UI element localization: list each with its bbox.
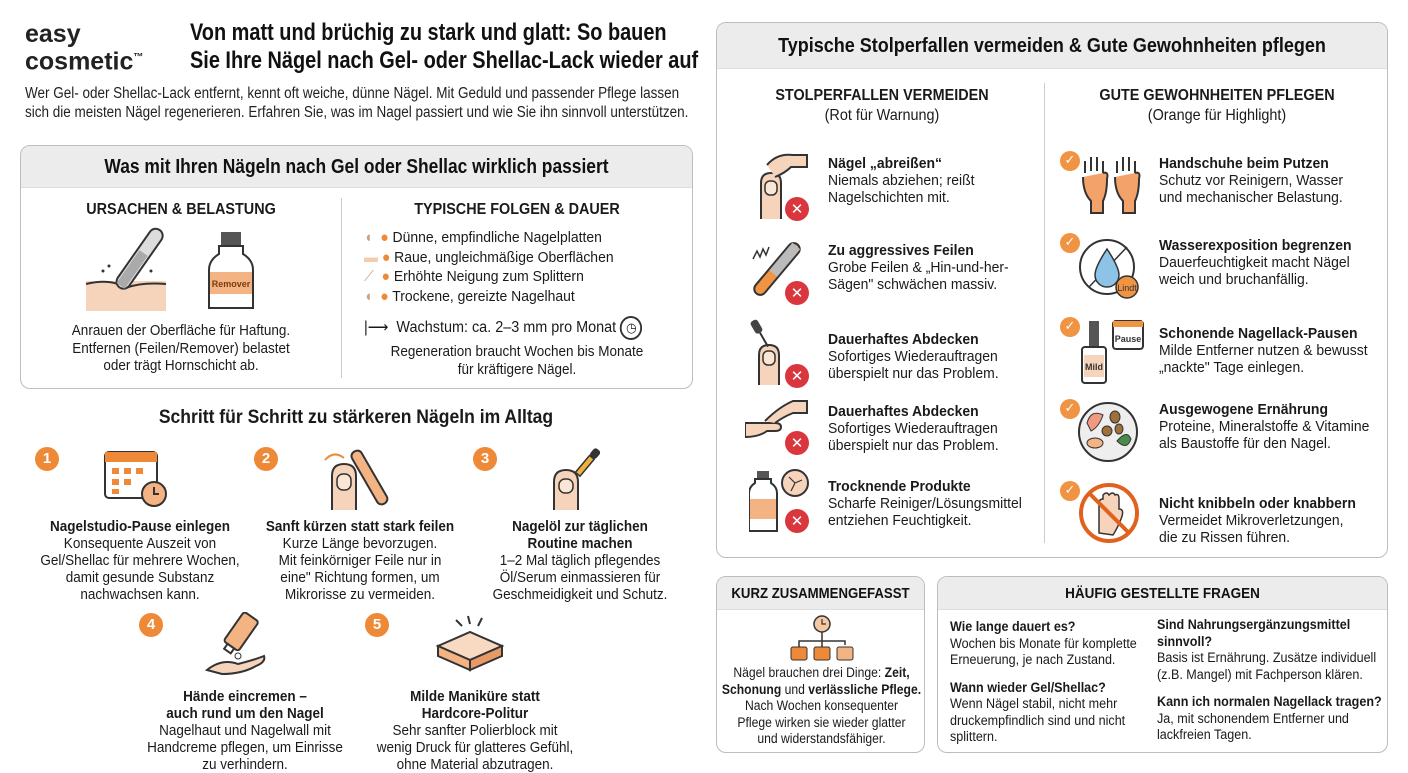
intro text: sich die meisten Nägel regenerieren. Erfahren Sie, was im Nagel passiert und wie Sie ihn sinnvoll unterstützen. (25, 104, 688, 121)
logo: cosmetic™ (25, 47, 143, 75)
step 1: Konsequente Auszeit von (64, 535, 216, 552)
pitfall 3: ✕ (791, 367, 803, 385)
step 3: 1–2 Mal täglich pflegendes (500, 552, 660, 569)
icon: food plate (1078, 402, 1138, 462)
pitfall 2: Sägen" schwächen massiv. (828, 276, 997, 293)
pitfall 4: Sofortiges Wiederauftragen (828, 420, 998, 437)
consequences list: ◖ ● Dünne, empfindliche Nagelplatten (364, 229, 602, 246)
icon: remover bottle (208, 232, 254, 309)
FAQ column right: sinnvoll? (1157, 634, 1212, 648)
habit 3 (1060, 317, 1368, 384)
panel heading: Was mit Ihren Nägeln nach Gel oder Shellac wirklich passiert (104, 156, 609, 178)
icon: hand flat (745, 400, 808, 438)
habit 5: ✓ (1065, 483, 1075, 498)
icon: remover bottle: Remover (212, 279, 251, 289)
FAQ column right: Ja, mit schonendem Entferner und (1157, 710, 1349, 726)
step 4: zu verhindern. (202, 756, 288, 773)
logo (25, 20, 143, 75)
habit 4: Proteine, Mineralstoffe & Vitamine (1159, 418, 1369, 435)
habit 3: „nackte" Tage einlegen. (1159, 359, 1304, 376)
habit 3: Schonende Nagellack-Pausen (1159, 325, 1357, 342)
step 2 (254, 447, 454, 603)
FAQ heading: HÄUFIG GESTELLTE FRAGEN (1065, 585, 1260, 602)
icon: polish and pause calendar (1081, 320, 1144, 384)
step 4: Hände eincremen – (183, 688, 307, 705)
left column heading: STOLPERFALLEN VERMEIDEN (775, 87, 989, 104)
right column heading (1099, 87, 1335, 124)
summary text: Nägel brauchen drei Dinge: Zeit, (733, 665, 910, 680)
pitfall 1 (760, 154, 975, 221)
step 5 (365, 613, 573, 773)
FAQ column left: Wie lange dauert es? (950, 619, 1075, 634)
pitfall 1: ✕ (791, 200, 803, 218)
summary heading (717, 577, 924, 610)
right column heading: GUTE GEWOHNHEITEN PFLEGEN (1099, 87, 1335, 104)
summary text: Nach Wochen konsequenter (745, 698, 898, 713)
habit 2: Dauerfeuchtigkeit macht Nägel (1159, 254, 1350, 271)
FAQ column right: (z.B. Mangel) mit Fachperson klären. Kann ich normalen Nagellack tragen? (1157, 666, 1382, 709)
step 1: damit gesunde Substanz (66, 569, 214, 586)
icon: hand cream (205, 612, 266, 675)
pitfall 2 (752, 242, 1009, 305)
logo: easy (25, 20, 81, 48)
left column heading: (Rot für Warnung) (825, 107, 939, 124)
FAQ column left (950, 619, 1137, 746)
habit 1: Schutz vor Reinigern, Wasser (1159, 172, 1343, 189)
title: Sie Ihre Nägel nach Gel- oder Shellac-Lack wieder auf (190, 47, 698, 74)
regeneration text: Regeneration braucht Wochen bis Monate (391, 343, 643, 360)
pitfall 3: Dauerhaftes Abdecken (828, 331, 979, 348)
step 1: Gel/Shellac für mehrere Wochen, (40, 552, 240, 569)
left column heading (775, 87, 989, 124)
step 1: 1 (43, 450, 51, 467)
habit 5: Vermeidet Mikroverletzungen, (1159, 512, 1344, 529)
icon: polish and pause calendar: Pause (1115, 334, 1141, 344)
panel heading: Typische Stolperfallen vermeiden & Gute Gewohnheiten pflegen (778, 35, 1326, 57)
habit 4: ✓ (1065, 401, 1075, 416)
step 5: Sehr sanfter Polierblock mit (392, 722, 558, 739)
habit 3: Milde Entferner nutzen & bewusst (1159, 342, 1368, 359)
icon: polishing block (436, 616, 504, 672)
consequences list (364, 229, 614, 304)
FAQ column right: lackfreien Tagen. (1157, 727, 1252, 742)
title: Von matt und brüchig zu stark und glatt: So bauen (190, 19, 667, 46)
pitfall 5 (749, 469, 1022, 533)
step 1 (35, 447, 240, 603)
step 5: 5 (373, 616, 381, 633)
icon: clock hierarchy (787, 615, 857, 663)
pitfall 3: überspielt nur das Problem. (828, 365, 999, 382)
summary text: Schonung und verlässliche Pflege. (722, 682, 921, 696)
FAQ column left: Wochen bis Monate für komplette (950, 636, 1137, 650)
FAQ column left: splittern. (950, 729, 997, 744)
consequences list: ◖ ● Trockene, gereizte Nagelhaut (364, 288, 575, 304)
icon: nail oil dropper (553, 448, 600, 510)
step 3: Öl/Serum einmassieren für (500, 569, 660, 586)
icon: water drop crossed (1079, 239, 1139, 299)
pitfall 5: ✕ (791, 512, 803, 530)
icon: calendar (104, 451, 167, 507)
step 2: eine" Richtung formen, um (280, 569, 440, 586)
left text: Anrauen der Oberfläche für Haftung. (72, 322, 290, 339)
step 4: auch rund um den Nagel (166, 705, 324, 722)
habit 4 (1060, 399, 1369, 462)
panel: what happens (20, 145, 693, 389)
growth line: |⟶ Wachstum: ca. 2–3 mm pro Monat (364, 319, 616, 336)
growth line (364, 316, 642, 340)
step 2: Mikrorisse zu vermeiden. (285, 586, 435, 603)
pitfall 3: Sofortiges Wiederauftragen (828, 348, 998, 365)
summary text: Pflege wirken sie wieder glatter (737, 714, 906, 730)
habit 3: ✓ (1065, 319, 1075, 334)
pitfall 5: Scharfe Reiniger/Lösungsmittel (828, 495, 1022, 512)
step 3: Routine machen (527, 535, 633, 552)
FAQ column right (1157, 617, 1382, 744)
habit 2: Wasserexposition begrenzen (1159, 237, 1352, 254)
left text: oder trägt Hornschicht ab. (103, 357, 259, 374)
pitfall 2: Zu aggressives Feilen (828, 242, 974, 259)
step 3: Nagelöl zur täglichen (512, 518, 648, 535)
left text (72, 322, 290, 374)
step 5: wenig Druck für glatteres Gefühl, (377, 739, 573, 756)
icon: water drop crossed: Lindt (1117, 283, 1137, 293)
step 1: nachwachsen kann. (80, 586, 200, 603)
FAQ column right: Sind Nahrungsergänzungsmittel (1157, 617, 1350, 632)
right heading: TYPISCHE FOLGEN & DAUER (414, 201, 620, 218)
step 5: ohne Material abzutragen. (397, 756, 553, 773)
panel: FAQ (937, 576, 1388, 753)
regeneration text: für kräftigere Nägel. (458, 361, 576, 378)
regeneration text (391, 343, 643, 378)
step 2: Sanft kürzen statt stark feilen (266, 518, 454, 535)
icon: nail file on skin (86, 228, 166, 311)
pitfall 5: Trocknende Produkte (828, 478, 971, 495)
habit 2: weich und bruchanfällig. (1159, 271, 1309, 288)
icon: finger and file (324, 450, 388, 510)
habit 2 (1060, 233, 1352, 299)
panel: summary (716, 576, 925, 753)
pitfall 3 (750, 320, 999, 388)
habit 4: Ausgewogene Ernährung (1159, 401, 1328, 418)
habit 2: ✓ (1065, 235, 1075, 250)
pitfall 1: Niemals abziehen; reißt (828, 172, 975, 189)
pitfall 1: Nagelschichten mit. (828, 189, 950, 206)
consequences list: ⟋ ● Erhöhte Neigung zum Splittern (364, 268, 584, 285)
intro text (25, 85, 688, 121)
growth line: ◷ (626, 320, 637, 335)
left text: Entfernen (Feilen/Remover) belastet (72, 340, 290, 356)
pitfall 1: Nägel „abreißen“ (828, 155, 942, 172)
FAQ column left: Erneuerung, je nach Zustand. Wann wieder Gel/Shellac? (950, 652, 1115, 694)
step 5: Milde Maniküre statt (410, 688, 540, 705)
step 4: 4 (147, 616, 155, 633)
FAQ column left: Wenn Nägel stabil, nicht mehr (950, 696, 1117, 711)
summary heading: KURZ ZUSAMMENGEFASST (731, 585, 910, 602)
habit 5: Nicht knibbeln oder knabbern (1159, 495, 1356, 512)
step 2: Mit feinkörniger Feile nur in (279, 552, 441, 569)
step 5: Hardcore-Politur (422, 705, 528, 722)
pitfall 2: ✕ (791, 284, 803, 302)
step 3 (473, 447, 667, 603)
pitfall 4: ✕ (791, 434, 803, 452)
habit 5 (1060, 481, 1356, 546)
steps heading: Schritt für Schritt zu stärkeren Nägeln im Alltag (159, 406, 553, 428)
step 2: Kurze Länge bevorzugen. (283, 535, 437, 552)
consequences list: ▬ ● Raue, ungleichmäßige Oberflächen (364, 248, 614, 266)
habit 1: Handschuhe beim Putzen (1159, 155, 1329, 172)
step 3: Geschmeidigkeit und Schutz. (493, 586, 667, 603)
summary text: und widerstandsfähiger. (757, 731, 886, 746)
left heading: URSACHEN & BELASTUNG (86, 201, 276, 218)
title (190, 19, 698, 74)
FAQ heading (938, 577, 1387, 610)
icon: polish and pause calendar: Mild (1085, 362, 1103, 372)
step 4 (139, 612, 343, 773)
step 4: Handcreme pflegen, um Einrisse (147, 739, 343, 756)
step 3: 3 (481, 450, 489, 467)
pitfall 4 (745, 400, 999, 455)
pitfall 2: Grobe Feilen & „Hin-und-her- (828, 259, 1009, 276)
step 2: 2 (262, 450, 270, 467)
habit 1: ✓ (1065, 153, 1075, 168)
habit 1: und mechanischer Belastung. (1159, 189, 1343, 206)
habit 1 (1060, 151, 1343, 214)
FAQ column right: Basis ist Ernährung. Zusätze individuell (1157, 650, 1376, 665)
step 1: Nagelstudio-Pause einlegen (50, 518, 230, 535)
icon: gloves (1082, 157, 1140, 214)
icon: fingers peeling nail (760, 154, 808, 219)
FAQ column left: druckempfindlich sind und nicht (950, 712, 1125, 728)
habit 5: die zu Rissen führen. (1159, 529, 1290, 546)
pitfall 4: Dauerhaftes Abdecken (828, 403, 979, 420)
icon: nail brush (750, 320, 780, 385)
intro text: Wer Gel- oder Shellac-Lack entfernt, kennt oft weiche, dünne Nägel. Mit Geduld und passender Pflege lassen (25, 85, 679, 102)
icon: solvent bottle and cracked nail (749, 469, 809, 532)
summary text (709, 665, 934, 748)
panel heading (717, 23, 1387, 69)
panel heading (21, 146, 692, 188)
right column heading: (Orange für Highlight) (1148, 107, 1286, 124)
icon: no picking hand (1077, 479, 1143, 545)
step 4: Nagelhaut und Nagelwall mit (159, 722, 331, 739)
pitfall 4: überspielt nur das Problem. (828, 437, 999, 454)
pitfall 5: entziehen Feuchtigkeit. (828, 512, 971, 529)
habit 4: als Baustoffe für den Nagel. (1159, 435, 1331, 452)
icon: aggressive file (752, 242, 801, 296)
panel: pitfalls and habits (716, 22, 1388, 558)
